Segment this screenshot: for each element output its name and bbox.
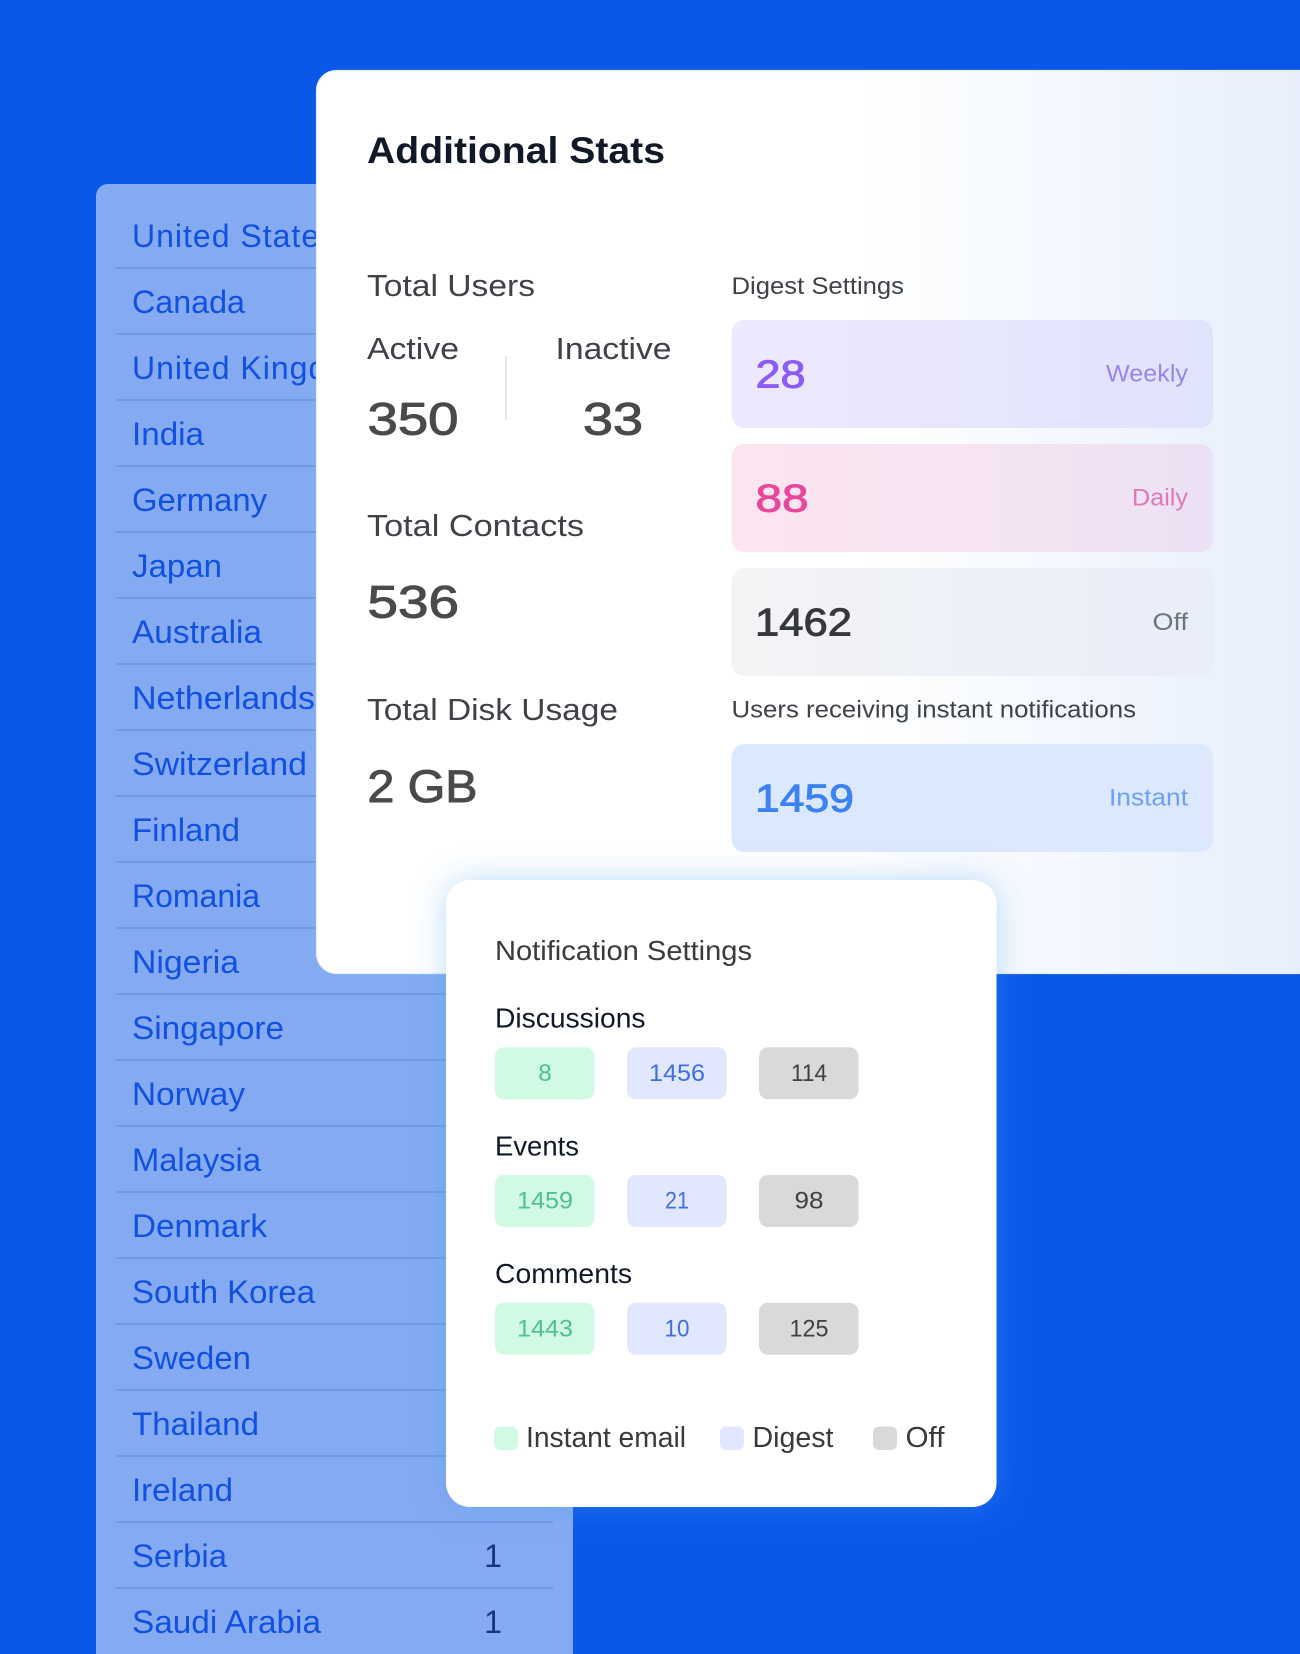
row: comments: 10 xyxy=(664,1315,690,1342)
card: daily digest: 88 xyxy=(756,478,808,521)
legend: Instant email xyxy=(526,1422,686,1454)
panel: countries list: Denmark xyxy=(132,1208,268,1244)
label: users receiving instant notifications: Users receiving instant notifications xyxy=(732,696,1136,724)
row: events: 21 xyxy=(665,1188,689,1214)
panel: countries list: Serbia xyxy=(132,1538,227,1574)
panel: countries list: Malaysia xyxy=(132,1142,261,1178)
panel: countries list: Germany xyxy=(132,482,267,518)
row: comments: 1443 xyxy=(517,1315,573,1342)
row: events: 98 xyxy=(794,1188,824,1214)
panel: countries list: Norway xyxy=(132,1076,245,1112)
row: events: 1459 xyxy=(517,1188,573,1214)
card: weekly digest xyxy=(732,320,1213,428)
row: comments: 125 xyxy=(790,1315,828,1342)
row: discussions: Discussions xyxy=(495,1002,646,1034)
heading: additional stats: Additional Stats xyxy=(367,130,665,171)
panel: countries list: 1 xyxy=(484,1604,502,1640)
card: daily digest: Daily xyxy=(1132,485,1188,512)
panel: countries list: United Kingdom xyxy=(132,350,374,386)
stat: total contacts xyxy=(367,508,584,628)
panel: countries list: Canada xyxy=(132,284,245,320)
label: digest settings: Digest Settings xyxy=(732,273,904,300)
panel: countries list: India xyxy=(132,416,204,452)
row: events xyxy=(495,1130,858,1227)
card: instant: 1459 xyxy=(755,777,854,820)
row: events: Events xyxy=(495,1130,579,1162)
card: daily digest xyxy=(732,444,1213,552)
panel: countries list: Thailand xyxy=(132,1406,259,1442)
row: discussions: 114 xyxy=(791,1060,827,1087)
card: weekly digest: Weekly xyxy=(1106,361,1188,388)
row: comments: Comments xyxy=(495,1258,632,1289)
stat: total users: 350 xyxy=(368,394,458,444)
row: discussions xyxy=(495,1002,858,1099)
stat: total disk usage: Total Disk Usage xyxy=(367,692,618,727)
stat: total users: 33 xyxy=(583,394,643,444)
panel: countries list: Saudi Arabia xyxy=(132,1604,321,1640)
card: instant xyxy=(732,744,1213,852)
legend xyxy=(494,1422,945,1454)
card: digest off xyxy=(732,568,1213,676)
heading: notification settings: Notification Settings xyxy=(495,935,752,966)
panel: countries list: Ireland xyxy=(132,1472,233,1508)
panel: countries list: Finland xyxy=(132,812,240,848)
stat: total users: Inactive xyxy=(556,331,672,366)
panel: countries list: Australia xyxy=(132,614,262,650)
panel: additional stats xyxy=(316,70,1300,974)
row: discussions: 1456 xyxy=(649,1060,705,1087)
stat: total users xyxy=(367,268,672,444)
legend: Digest xyxy=(752,1422,834,1454)
card: digest off: Off xyxy=(1152,609,1188,636)
panel: countries list: Switzerland xyxy=(132,746,307,782)
panel: countries list: South Korea xyxy=(132,1274,315,1310)
stat: total contacts: Total Contacts xyxy=(367,508,584,543)
panel: countries list: Netherlands xyxy=(132,680,315,716)
panel: countries list: Romania xyxy=(132,878,260,914)
stat: total disk usage: 2 GB xyxy=(368,761,478,812)
panel: countries list: Nigeria xyxy=(132,944,239,980)
panel: countries list: 1 xyxy=(484,1538,502,1574)
row: discussions: 8 xyxy=(538,1060,552,1087)
card: digest off: 1462 xyxy=(755,602,852,645)
panel: countries list: Japan xyxy=(132,548,222,584)
panel: countries list: United States xyxy=(132,218,337,254)
panel: countries list: Singapore xyxy=(132,1010,284,1046)
panel: notification settings xyxy=(446,880,996,1507)
stat: total contacts: 536 xyxy=(368,576,459,628)
stat: total users: Total Users xyxy=(367,268,535,303)
panel: countries list xyxy=(96,184,573,1654)
card: instant: Instant xyxy=(1109,785,1188,812)
row: comments xyxy=(495,1258,858,1355)
stat: total disk usage xyxy=(367,692,618,812)
panel: countries list: Sweden xyxy=(132,1340,251,1376)
card: weekly digest: 28 xyxy=(756,353,806,396)
stat: total users: Active xyxy=(367,331,459,366)
legend: Off xyxy=(906,1422,945,1454)
